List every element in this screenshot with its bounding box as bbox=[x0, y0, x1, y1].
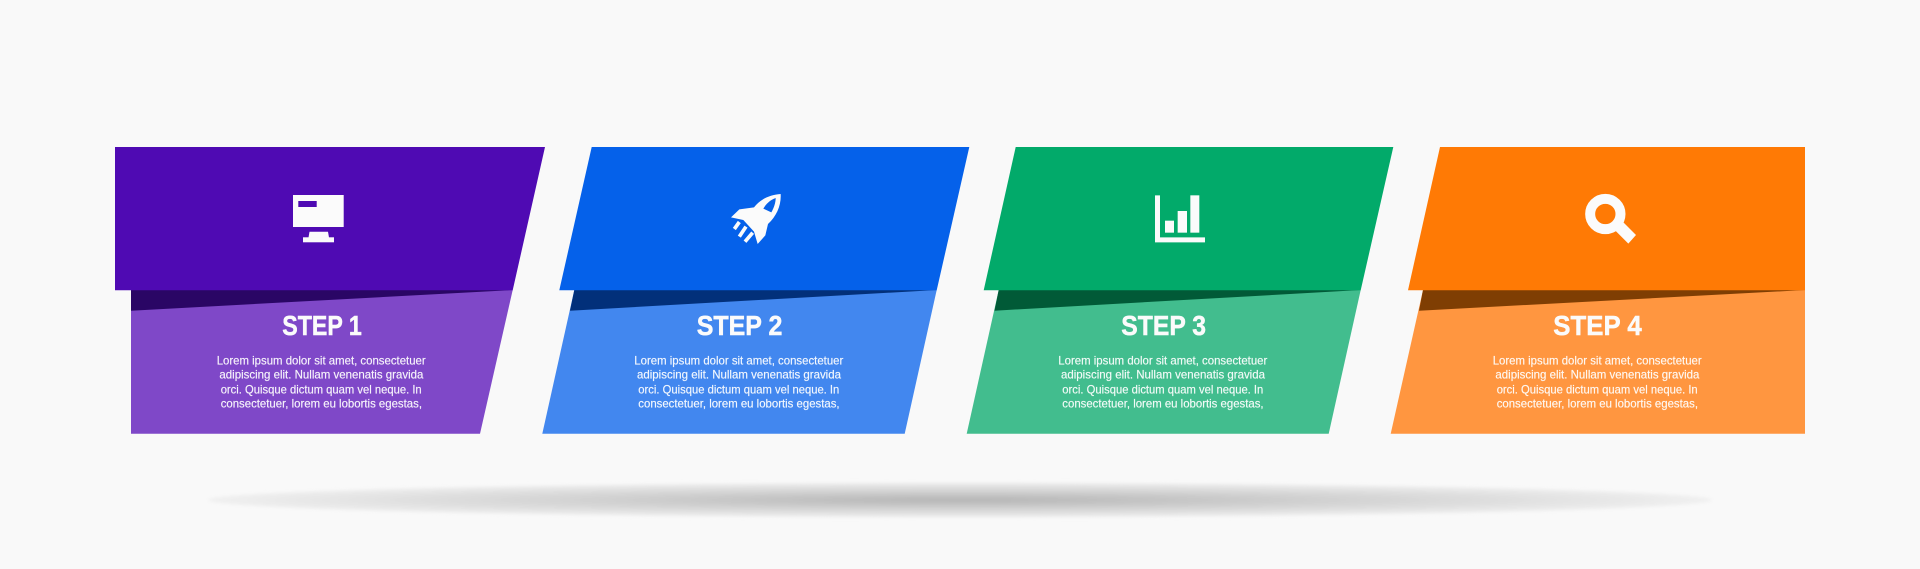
text block: step 1 bbox=[217, 354, 426, 411]
fold shadow step 2 bbox=[570, 290, 937, 311]
text block: step 3: adipiscing elit. Nullam venenatis gravida bbox=[1061, 369, 1266, 382]
text block: step 2: adipiscing elit. Nullam venenatis gravida bbox=[637, 369, 842, 382]
text block: step 2: consectetuer, lorem eu lobortis egestas, bbox=[638, 398, 840, 411]
heading: step 2: STEP 2 bbox=[697, 310, 782, 341]
floor shadow bbox=[208, 482, 1712, 518]
text block: step 4: consectetuer, lorem eu lobortis egestas, bbox=[1497, 398, 1698, 411]
icon: bar chart bbox=[1155, 195, 1205, 242]
text block: step 4 bbox=[1493, 354, 1702, 411]
icon: rocket bbox=[731, 194, 781, 244]
fold shadow step 3 bbox=[994, 290, 1361, 311]
upper panel step 1 bbox=[115, 147, 545, 290]
text block: step 1: Lorem ipsum dolor sit amet, consectetuer bbox=[217, 354, 426, 367]
text block: step 3 bbox=[1058, 354, 1267, 411]
text block: step 2: Lorem ipsum dolor sit amet, consectetuer bbox=[634, 354, 843, 367]
text block: step 3: consectetuer, lorem eu lobortis egestas, bbox=[1062, 398, 1264, 411]
text block: step 3: orci. Quisque dictum quam vel neque. In bbox=[1062, 383, 1263, 396]
lower panel step 2 bbox=[542, 290, 937, 434]
text block: step 1: consectetuer, lorem eu lobortis egestas, bbox=[221, 398, 422, 411]
lower panel step 1 bbox=[131, 290, 513, 434]
text block: step 3: Lorem ipsum dolor sit amet, consectetuer bbox=[1058, 354, 1267, 367]
panel: step 4 bbox=[1391, 147, 1805, 434]
icon: magnifier bbox=[1590, 199, 1636, 244]
fold shadow step 1 bbox=[131, 290, 513, 311]
lower panel step 3 bbox=[967, 290, 1361, 434]
text block: step 1: adipiscing elit. Nullam venenatis gravida bbox=[219, 369, 424, 382]
panel: step 3 bbox=[967, 147, 1393, 434]
text block: step 1: orci. Quisque dictum quam vel neque. In bbox=[221, 383, 422, 396]
text block: step 4: Lorem ipsum dolor sit amet, consectetuer bbox=[1493, 354, 1702, 367]
heading: step 3: STEP 3 bbox=[1121, 310, 1206, 341]
text block: step 2: orci. Quisque dictum quam vel neque. In bbox=[638, 383, 839, 396]
text block: step 4: orci. Quisque dictum quam vel neque. In bbox=[1497, 383, 1698, 396]
lower panel step 4 bbox=[1391, 290, 1805, 434]
fold shadow step 4 bbox=[1419, 290, 1805, 311]
panel: step 1 bbox=[115, 147, 545, 434]
heading: step 1: STEP 1 bbox=[282, 310, 362, 341]
upper panel step 4 bbox=[1408, 147, 1805, 290]
heading: step 4: STEP 4 bbox=[1553, 310, 1642, 341]
panel: step 2 bbox=[542, 147, 969, 434]
icon: monitor bbox=[293, 195, 344, 242]
upper panel step 2 bbox=[559, 147, 969, 290]
upper panel step 3 bbox=[984, 147, 1393, 290]
text block: step 4: adipiscing elit. Nullam venenatis gravida bbox=[1495, 369, 1700, 382]
text block: step 2 bbox=[634, 354, 843, 411]
